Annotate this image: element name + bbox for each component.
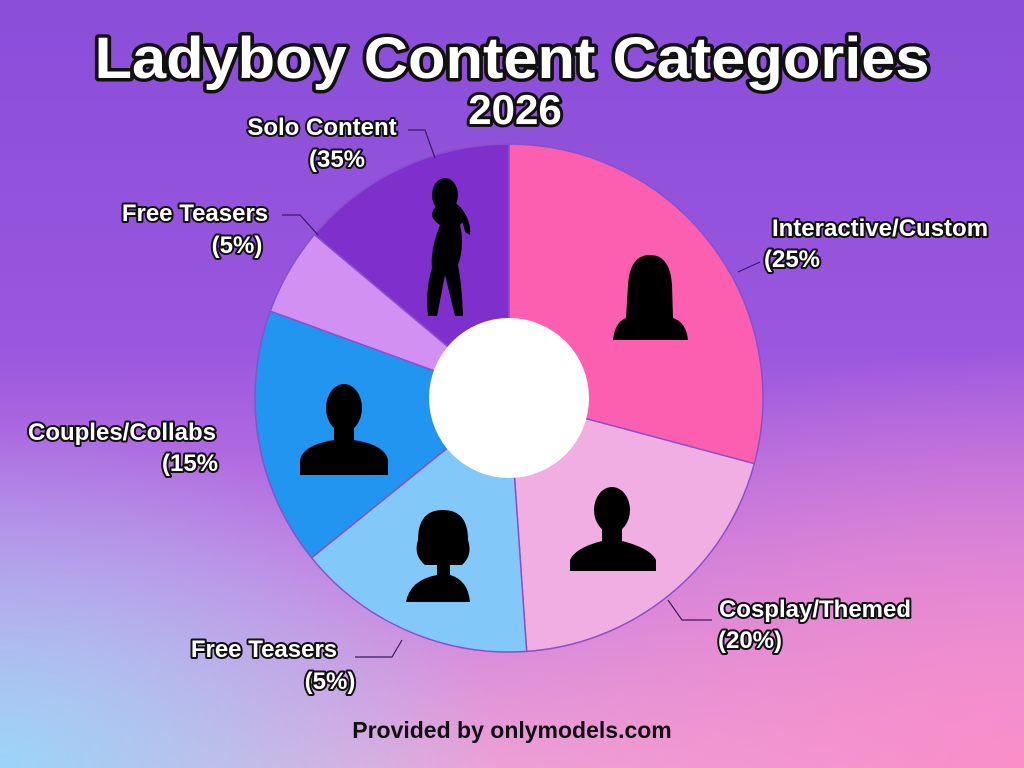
segment: cosplay/themed bbox=[509, 398, 754, 651]
icon: man right bbox=[570, 487, 656, 571]
label: free teasers top bbox=[122, 200, 318, 259]
label: solo content: Solo Content bbox=[247, 114, 397, 141]
label: couples/collabs: Couples/Collabs bbox=[28, 419, 216, 446]
title: 2026 bbox=[468, 86, 562, 133]
icon: curly hair woman bbox=[406, 510, 470, 602]
label: interactive/custom bbox=[738, 215, 988, 273]
footer credit: Provided by onlymodels.com bbox=[352, 717, 672, 743]
segment: free teasers bottom bbox=[312, 398, 527, 652]
label: couples/collabs: (15% bbox=[162, 450, 218, 477]
label: free teasers top: (5%) bbox=[212, 232, 262, 259]
label: cosplay/themed: (20%) bbox=[718, 627, 782, 654]
icon: standing woman silhouette bbox=[427, 178, 470, 316]
label: solo content: (35% bbox=[309, 146, 365, 173]
segment: solo content bbox=[314, 144, 509, 398]
icon: man left bbox=[300, 384, 388, 475]
donut chart bbox=[255, 144, 763, 652]
segment: interactive/custom bbox=[509, 144, 763, 464]
segment: couples/collabs bbox=[255, 311, 509, 558]
label: cosplay/themed: Cosplay/Themed bbox=[719, 596, 911, 623]
label: cosplay/themed bbox=[668, 596, 911, 654]
title: Ladyboy Content Categories bbox=[94, 26, 930, 91]
label: free teasers bottom: (5%) bbox=[305, 668, 355, 695]
center hole bbox=[429, 318, 589, 478]
label: free teasers bottom bbox=[191, 636, 402, 695]
segment: free teasers top bbox=[270, 235, 509, 398]
label: interactive/custom: (25% bbox=[764, 246, 820, 273]
label: solo content bbox=[247, 114, 435, 173]
label: interactive/custom: Interactive/Custom bbox=[772, 215, 988, 242]
label: couples/collabs bbox=[28, 419, 218, 477]
icon: long-hair woman bbox=[613, 255, 688, 340]
title bbox=[94, 26, 930, 133]
label: free teasers top: Free Teasers bbox=[122, 200, 268, 227]
label: free teasers bottom: Free Teasers bbox=[191, 636, 337, 663]
